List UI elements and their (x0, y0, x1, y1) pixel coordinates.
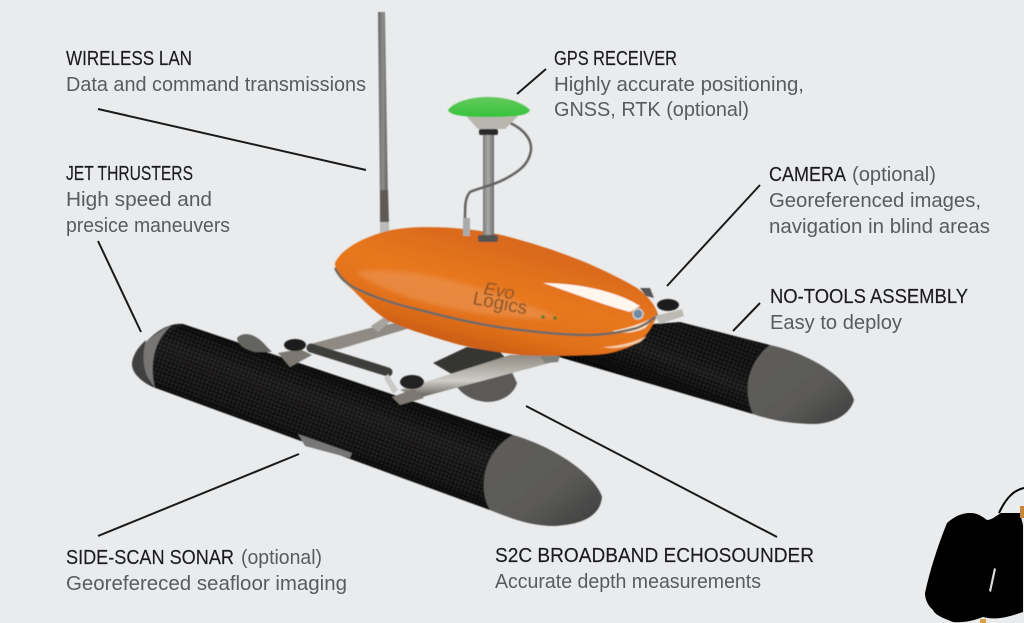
label: S2C echosounder: Accurate depth measurements (495, 571, 761, 593)
label: wireless LAN: WIRELESS LAN (66, 48, 192, 70)
label: side-scan sonar: SIDE-SCAN SONAR (66, 547, 234, 569)
leader line: jet thrusters (98, 241, 141, 332)
label: S2C echosounder (495, 545, 814, 593)
label: jet thrusters: High speed and (66, 189, 212, 211)
rear cross arm and handle (237, 312, 410, 372)
GPS receiver (448, 97, 530, 129)
right nose cap (748, 345, 854, 424)
leader line: wireless LAN (98, 109, 366, 170)
label: no-tools assembly (770, 286, 968, 334)
left rear cap (142, 325, 172, 388)
label: S2C echosounder: S2C BROADBAND ECHOSOUNDER (495, 545, 814, 567)
leader line: echosounder (526, 406, 777, 537)
label: side-scan sonar: Georefereced seafloor imaging (66, 573, 347, 595)
cable connector (463, 218, 470, 236)
leader line: camera (667, 185, 760, 286)
rudder fin (433, 347, 517, 402)
hull highlights (355, 270, 560, 319)
label: GPS receiver: GPS RECEIVER (554, 48, 677, 70)
hull (335, 227, 658, 356)
label: wireless LAN: Data and command transmissions (66, 74, 366, 96)
label: GPS receiver: GNSS, RTK (optional) (554, 99, 749, 121)
hull: Logics (471, 288, 529, 319)
left pontoon (132, 324, 602, 526)
front cross arm (384, 355, 560, 405)
side-scan sonar plate (298, 434, 352, 458)
hull seam (335, 268, 658, 335)
label: camera: CAMERA (769, 164, 847, 186)
right cross arm knob (640, 288, 684, 324)
label: no-tools assembly: NO-TOOLS ASSEMBLY (770, 286, 968, 308)
leader line: side-scan sonar (98, 454, 299, 536)
vessel illustration (132, 12, 854, 526)
label: jet thrusters: presice maneuvers (66, 215, 230, 237)
label: GPS receiver: Highly accurate positioning, (554, 74, 804, 96)
label: camera (769, 164, 990, 238)
black redaction blob (925, 488, 1024, 623)
GPS mast (478, 129, 498, 242)
right pontoon (556, 322, 854, 424)
label: no-tools assembly: Easy to deploy (770, 312, 902, 334)
hull logo: Evo (482, 278, 516, 303)
leader line: GPS (517, 69, 546, 94)
antenna (378, 12, 389, 233)
label: side-scan sonar: (optional) (241, 547, 322, 569)
label: wireless LAN (66, 48, 366, 96)
label: camera: navigation in blind areas (769, 216, 990, 238)
label: camera: (optional) (852, 164, 936, 186)
left nose cap (484, 435, 602, 526)
label: jet thrusters (66, 163, 230, 237)
leader line: no-tools assembly (733, 303, 760, 331)
label: GPS receiver (554, 48, 804, 121)
GPS cable (465, 122, 531, 220)
label: camera: Georeferenced images, (769, 190, 981, 212)
label: side-scan sonar (66, 547, 347, 595)
label: jet thrusters: JET THRUSTERS (66, 163, 193, 185)
